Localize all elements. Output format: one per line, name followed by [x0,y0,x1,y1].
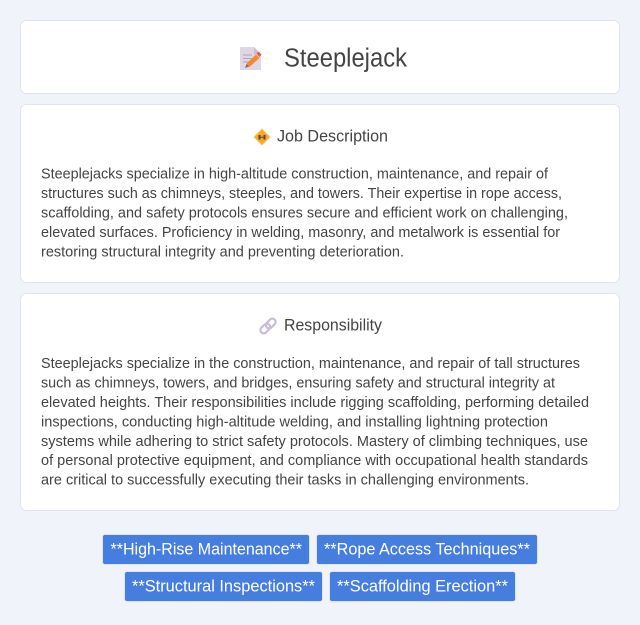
heading: Responsibility: Responsibility [284,316,383,334]
panel: title [20,20,620,94]
text block: job description body [41,166,568,260]
icon: chain link [259,317,277,335]
text block: job description body: elevated surfaces. Proficiency in welding, masonry, and metalwork is essential for [41,225,560,241]
tag: Rope Access Techniques [316,534,538,564]
text block: responsibility body: such as chimneys, towers, and bridges, ensuring safety and structural integrity at [41,376,555,392]
text block: responsibility body: of personal protective equipment, and compliance with occupational health standards [41,453,588,469]
tag: Structural Inspections [124,572,322,602]
panel: responsibility [20,294,620,510]
text block: responsibility body: systems while adhering to strict safety protocols. Mastery of climbing techniques, use [41,434,588,450]
panel: job description [20,104,620,282]
heading: Steeplejack: Steeplejack [284,44,407,72]
icon: document with pencil [240,47,262,70]
heading: Job Description: Job Description [277,128,388,146]
tag: High-Rise Maintenance [102,534,310,564]
icon: diamond road sign [254,129,270,145]
tag: Structural Inspections: **Structural Inspections** [132,576,315,596]
text block: responsibility body [41,356,589,488]
text block: job description body: structures such as chimneys, steeples, and towers. Their expertise in rope access, [41,186,562,202]
text block: job description body: Steeplejacks specialize in high-altitude construction, maintenance, and repair of [41,166,549,182]
text block: responsibility body: Steeplejacks specialize in the construction, maintenance, and repair of tall structures [41,356,580,372]
tag: High-Rise Maintenance: **High-Rise Maintenance** [110,540,302,558]
text block: job description body: restoring structural integrity and preventing deterioration. [41,244,404,260]
tag: Scaffolding Erection: **Scaffolding Erection** [337,576,508,596]
text block: responsibility body: are critical to successfully executing their tasks in challenging environments. [41,472,529,488]
tag: Scaffolding Erection [330,572,516,602]
text block: responsibility body: inspections, conducting high-altitude welding, and installing lightning protection [41,414,548,430]
text block: responsibility body: elevated heights. Their responsibilities include rigging scaffolding, performing detailed [41,395,589,411]
tag: Rope Access Techniques: **Rope Access Techniques** [324,540,530,558]
text block: job description body: scaffolding, and safety protocols ensures secure and efficient work on challenging, [41,206,568,222]
